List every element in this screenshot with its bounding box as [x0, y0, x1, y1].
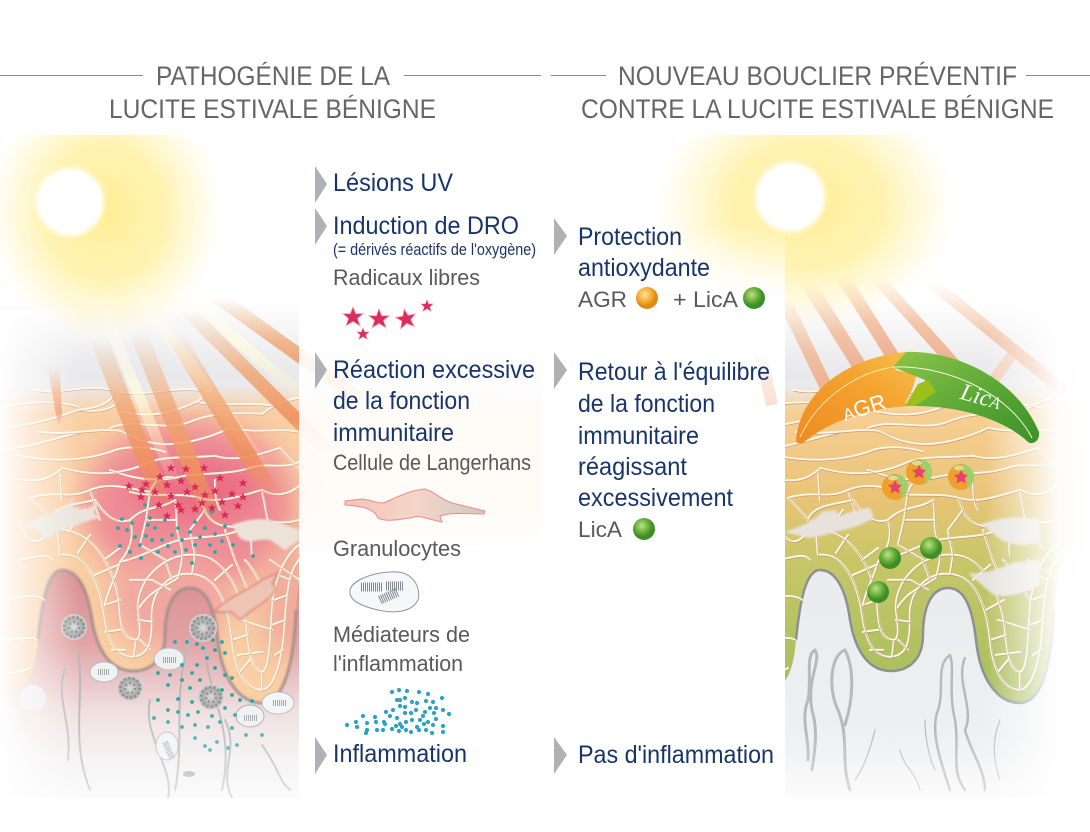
vessels right: [805, 650, 1000, 790]
dermal edge right: [796, 570, 1054, 703]
text: immune balance: LicA: [578, 517, 622, 542]
text: Induction de DRO: Radicaux libres: [333, 265, 480, 290]
text: excessive immune reaction: Réaction excessive: [333, 356, 535, 384]
text: Granulocytes: Granulocytes: [333, 536, 461, 561]
dermis left: [10, 570, 299, 776]
soft fades left: [0, 310, 300, 800]
text: immune balance: de la fonction: [578, 390, 715, 418]
icon: granulocyte: [350, 572, 419, 612]
text: immune balance: réagissant: [578, 453, 687, 481]
Langerhans cells in skin: [25, 497, 299, 620]
arrows right: [554, 218, 567, 774]
Langerhans cells right: [785, 508, 1040, 596]
title: right column: CONTRE LA LUCITE ESTIVALE BÉNIGNE: [581, 94, 1054, 124]
text: Induction de DRO: [333, 212, 536, 290]
text: excessive immune reaction: Cellule de Langerhans: [333, 450, 531, 475]
icon: sun glow right: [667, 135, 946, 406]
text: Induction de DRO: Induction de DRO: [333, 212, 519, 240]
text: mediators: Médiateurs de: [333, 622, 470, 647]
text: excessive immune reaction: de la fonction: [333, 387, 470, 415]
title: left column: [109, 61, 436, 124]
panel: pathogenesis illustration: [0, 74, 545, 800]
text: antioxidant protection: antioxydante: [578, 254, 710, 282]
icon: Langerhans cell: [345, 489, 485, 522]
soft fades right: [806, 326, 1090, 798]
grey sky right: [785, 326, 1034, 402]
immune cells: [20, 614, 294, 777]
panel: protective shield illustration: [667, 135, 1058, 792]
text: immune balance: immunitaire: [578, 422, 699, 450]
text: mediators: l'inflammation: [333, 651, 463, 676]
text: mediators: [333, 622, 470, 676]
icon: sun glow left: [0, 135, 214, 330]
dermis right: [785, 571, 1030, 776]
LicA spheres in skin: [867, 537, 942, 603]
icon: mediator dots: [345, 688, 451, 735]
icon: AGR + LicA shield: LicA: [957, 379, 1005, 415]
pale overlay over text column: [299, 330, 541, 776]
text: antioxidant protection: AGR: [578, 287, 627, 312]
text: immune balance: Retour à l'équilibre: [578, 358, 770, 386]
text: Inflammation: Inflammation: [333, 740, 467, 768]
UV rays right: [785, 282, 1055, 390]
icon: AGR + LicA shield: AGR: [839, 389, 889, 426]
title: left column: PATHOGÉNIE DE LA: [156, 61, 390, 91]
text: immune balance: excessivement: [578, 484, 733, 512]
text: no inflammation: Pas d'inflammation: [578, 741, 774, 769]
dermal edge shadow: [38, 570, 296, 703]
text: antioxidant protection: Protection: [578, 223, 682, 251]
text: antioxidant protection: + LicA: [673, 287, 738, 312]
teal mediators upper: [116, 503, 255, 565]
text: excessive immune reaction: immunitaire: [333, 419, 454, 447]
teal mediators lower: [152, 638, 264, 752]
icon: free radical stars: [342, 300, 434, 340]
text: antioxidant protection: [578, 223, 738, 312]
icon: AGR + LicA shield: [796, 352, 1039, 443]
arrows left: [315, 166, 327, 774]
text: Induction de DRO: (= dérivés réactifs de l'oxygène): [333, 240, 536, 259]
title: right column: [581, 61, 1054, 124]
antioxidant spheres in skin: [882, 459, 974, 500]
title: left column: LUCITE ESTIVALE BÉNIGNE: [109, 94, 436, 124]
text: excessive immune reaction: [333, 356, 535, 475]
grey sky behind the rays: [26, 326, 299, 402]
text: Lésions UV: Lésions UV: [333, 169, 453, 197]
title: right column: NOUVEAU BOUCLIER PRÉVENTIF: [618, 61, 1017, 91]
icon: AGR sphere: [636, 287, 658, 309]
icon: LicA sphere: [633, 518, 655, 540]
epidermis right: [785, 388, 1058, 702]
heading rules: [0, 74, 1090, 76]
red free radicals in skin: [125, 464, 247, 520]
text: immune balance: [578, 358, 770, 542]
UV rays left: [48, 300, 357, 522]
cell network left: [0, 388, 301, 691]
epidermis left: [0, 384, 545, 703]
icon: LicA sphere: [743, 287, 765, 309]
vessels left: [62, 640, 290, 798]
cell network right: [758, 388, 1059, 691]
